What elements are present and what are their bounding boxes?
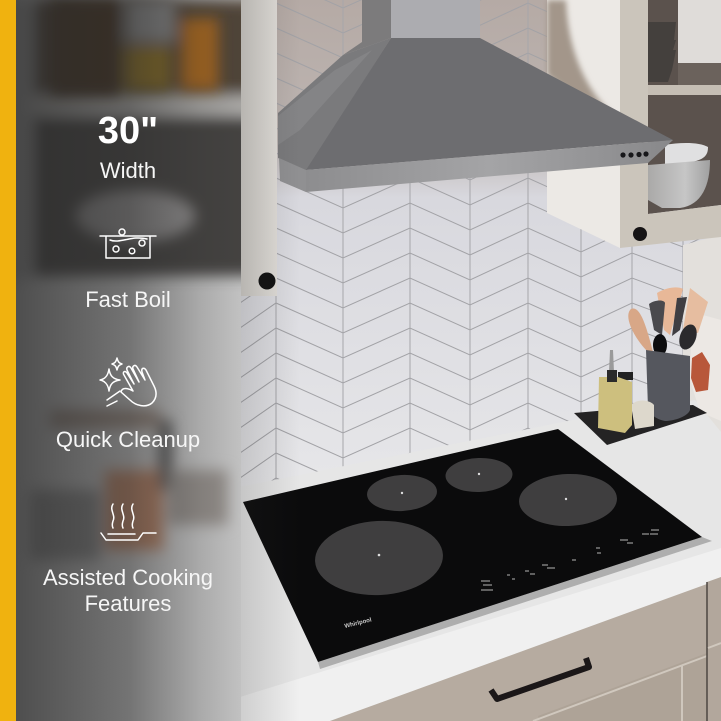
- bowls: [665, 143, 708, 165]
- hood front face: [306, 38, 673, 170]
- burner right: [518, 472, 618, 528]
- dark overlay: [0, 0, 300, 721]
- cabinet handle: [491, 658, 589, 699]
- hood buttons: [620, 151, 649, 158]
- dishes on shelf: [648, 22, 676, 82]
- range hood: [278, 0, 673, 192]
- slotted spoon: [676, 322, 700, 352]
- interior: [648, 0, 721, 214]
- frame: [620, 0, 721, 248]
- upper right cabinet: [547, 0, 721, 248]
- shadow on panel: [547, 0, 625, 140]
- shelf: [648, 85, 721, 95]
- cooktop controls: [481, 530, 659, 590]
- black spoon: [653, 334, 667, 356]
- crock: [646, 350, 690, 421]
- hood front band: [306, 140, 673, 192]
- cabinet knob: [258, 272, 276, 290]
- wooden spatula right: [683, 288, 708, 333]
- brand mark: Whirlpool: [344, 617, 373, 630]
- tray: [574, 405, 707, 445]
- lid behind bottle: [618, 372, 633, 380]
- burner small left: [366, 473, 438, 513]
- side panel: [547, 0, 620, 248]
- cabinet knob: [633, 227, 647, 241]
- label: fast boil: Fast Boil: [85, 287, 171, 312]
- icon: pot with bubbles: [100, 229, 156, 258]
- wooden spoon: [628, 308, 653, 352]
- hood left side: [278, 38, 391, 171]
- upper left cabinet frame: [240, 0, 277, 296]
- cooktop: [243, 429, 712, 669]
- icon: steaming pan: [101, 504, 156, 540]
- spec label: Width: [100, 158, 156, 183]
- bottle: [598, 377, 632, 433]
- wall tiles: [240, 0, 721, 520]
- yellow bar: [0, 0, 16, 721]
- cooktop glass: [243, 429, 702, 662]
- burner large front: [313, 518, 445, 598]
- blurred left area: [16, 0, 241, 721]
- burner small rear: [445, 457, 513, 493]
- label: quick cleanup: Quick Cleanup: [56, 427, 200, 452]
- icon: sparkling clean hand: [100, 358, 156, 406]
- dark turner: [672, 297, 687, 336]
- label: assisted cooking features: Assisted Cooking: [43, 565, 213, 590]
- jar: [631, 400, 654, 429]
- duct: [391, 0, 480, 38]
- wooden spatula centre: [657, 287, 683, 335]
- spec value: 30": [98, 110, 158, 152]
- right wall: [683, 235, 721, 445]
- label: assisted cooking features: Features: [85, 591, 171, 616]
- magazine: [690, 312, 721, 421]
- label: assisted cooking features: [43, 565, 213, 616]
- counter front edge: [240, 548, 721, 721]
- utensil set: [574, 287, 721, 445]
- counter top: [190, 400, 721, 721]
- spec: width: [98, 110, 158, 183]
- cooktop trim: [318, 537, 712, 669]
- black spatula: [649, 300, 665, 335]
- lower cabinets: [330, 577, 721, 721]
